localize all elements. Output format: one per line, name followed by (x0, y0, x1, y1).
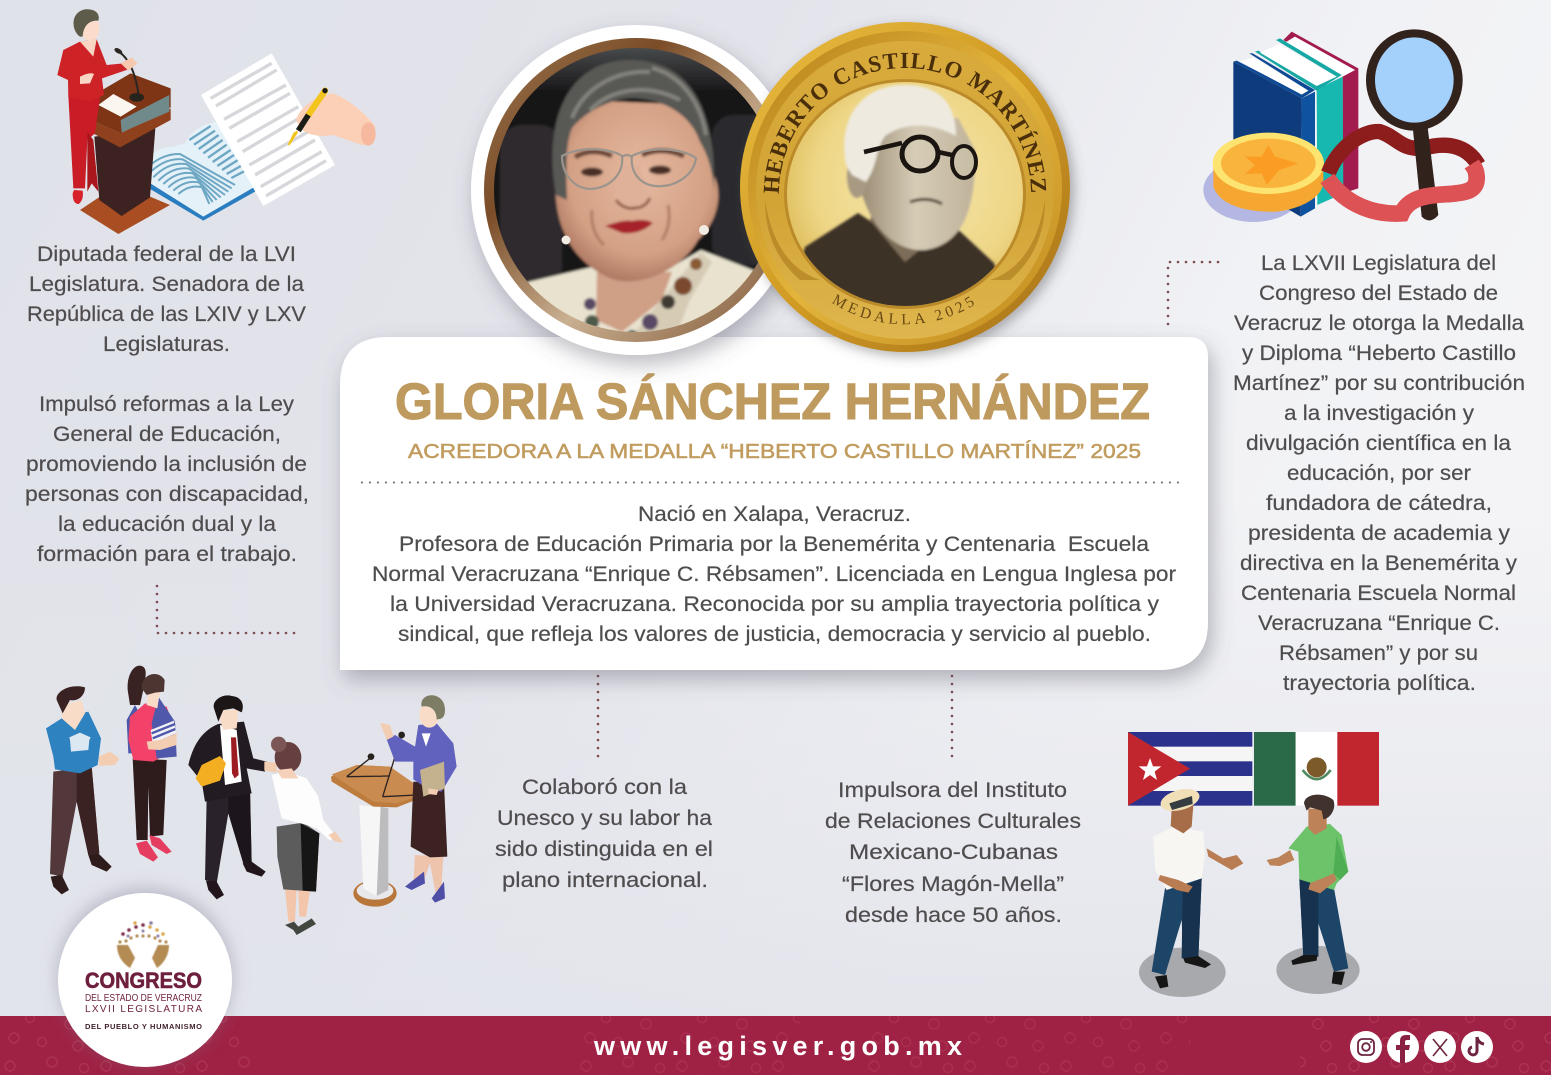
text block: Cuban institute: de Relaciones Culturales (825, 809, 1081, 833)
logo line 2: DEL ESTADO DE VERACRUZ (85, 992, 202, 1004)
icon: ribbon back (1328, 132, 1478, 173)
text block: Cuban institute: “Flores Magón-Mella” (842, 872, 1064, 896)
logo wordmark: CONGRESO (85, 968, 202, 993)
lips (605, 220, 653, 233)
illustration: group of people with speaker (46, 666, 457, 935)
person: student with backpack (127, 666, 177, 862)
text block: career left: la educación dual y la (58, 512, 276, 536)
text block: award reason: Martínez” por su contribución (1233, 371, 1525, 395)
person: man in dark suit with folder (188, 695, 277, 899)
text block: biography: sindical, que refleja los valores de justicia, democracia y servicio al pueblo. (398, 622, 1151, 646)
text block: award reason: divulgación científica en la (1246, 431, 1511, 455)
text block: career left (25, 242, 309, 566)
text block: career left: promoviendo la inclusión de (26, 452, 307, 476)
illustration: books, coin, ribbon and magnifier (1203, 29, 1478, 222)
person: woman in white blouse (271, 737, 343, 935)
blouse (526, 248, 754, 332)
text block: award reason: Congreso del Estado de (1259, 281, 1498, 305)
dotted connector: Cuba (951, 676, 953, 758)
social icons (1350, 1031, 1493, 1063)
heading: honoree name: GLORIA SÁNCHEZ HERNÁNDEZ (395, 373, 1150, 430)
text block: biography (372, 502, 1176, 646)
person: man in Unesco sweater (46, 686, 119, 894)
icon: speaker lectern (331, 732, 428, 907)
text block: career left: formación para el trabajo. (37, 542, 297, 566)
text block: award reason: Rébsamen” y por su (1279, 641, 1478, 665)
text block: award reason: a la investigación y (1284, 401, 1474, 425)
icon: coin shadow (1203, 158, 1303, 222)
footer band (0, 1016, 1551, 1075)
medal inscription: HEBERTO CASTILLO MARTÍNEZ (764, 52, 1046, 194)
website url: www.legisver.gob.mx (593, 1031, 962, 1061)
text block: career left: Legislaturas. (103, 332, 230, 356)
subheading: medal: ACREEDORA A LA MEDALLA “HEBERTO CASTILLO MARTÍNEZ” 2025 (408, 440, 1141, 463)
text block: Cuban institute (825, 778, 1081, 927)
flag: Mexico (1254, 732, 1379, 806)
text block: career left: Impulsó reformas a la Ley (39, 392, 294, 416)
icon: gold coin (1213, 133, 1324, 212)
icon: magnifier (1366, 29, 1463, 220)
logo mark (117, 921, 169, 968)
text block: Cuban institute: desde hace 50 años. (845, 903, 1062, 927)
text block: Unesco: plano internacional. (502, 868, 708, 892)
text block: career left: República de las LXIV y LXV (27, 302, 307, 326)
text block: career left: Diputada federal de la LVI (37, 242, 296, 266)
icon: podium (79, 47, 171, 234)
text block: biography: la Universidad Veracruzana. Reconocida por su amplia trayectoria política y (390, 592, 1159, 616)
medal portrait (802, 84, 996, 306)
logo: Congreso del Estado de Veracruz (58, 893, 232, 1067)
person: man with hat (1139, 785, 1243, 997)
medal year: MEDALLA 2025 (832, 294, 974, 324)
dotted connector: right text (1168, 262, 1218, 326)
icon: open book (129, 122, 257, 221)
text block: award reason: y Diploma “Heberto Castillo (1242, 341, 1516, 365)
icon: hand with pen (289, 88, 376, 146)
portrait: Gloria Sánchez Hernández (471, 25, 801, 355)
text block: Unesco: sido distinguida en el (495, 837, 713, 861)
glasses (562, 149, 696, 189)
brows and eyes (575, 151, 684, 157)
text block: award reason: Veracruzana “Enrique C. (1258, 611, 1500, 635)
text block: career left: General de Educación, (53, 422, 281, 446)
dotted connector: left text (157, 586, 300, 633)
text block: award reason: La LXVII Legislatura del (1261, 251, 1496, 275)
text block: award reason (1233, 251, 1525, 695)
icon: TikTok (1461, 1031, 1493, 1063)
text block: award reason: Veracruz le otorga la Medalla (1234, 311, 1524, 335)
illustration: legislator at podium with book and signing hand (57, 9, 376, 234)
text block: award reason: fundadora de cátedra, (1266, 491, 1492, 515)
text block: award reason: trayectoria política. (1283, 671, 1476, 695)
logo motto: DEL PUEBLO Y HUMANISMO (85, 1022, 202, 1031)
icon: X (1424, 1031, 1456, 1063)
text block: Cuban institute: Mexicano-Cubanas (849, 840, 1058, 864)
person: woman speaker (380, 695, 457, 903)
icon: Instagram (1350, 1031, 1382, 1063)
icon: legislator in red suit (57, 9, 137, 204)
text block: Cuban institute: Impulsora del Instituto (838, 778, 1067, 802)
icon: Facebook (1387, 1031, 1419, 1063)
text block: biography: Profesora de Educación Primaria por la Benemérita y Centenaria Escuela (399, 532, 1149, 556)
panel: central biography card (340, 337, 1208, 670)
text block: award reason: Centenaria Escuela Normal (1241, 581, 1516, 605)
text block: Unesco: Colaboró con la (522, 775, 687, 799)
medal: Heberto Castillo Martínez (740, 19, 1081, 363)
flag: Cuba (1128, 732, 1252, 806)
icon: ribbon front (1327, 164, 1477, 214)
dotted connector: Unesco (597, 676, 599, 758)
icon: document sheet (201, 53, 335, 206)
text block: Unesco (495, 775, 713, 892)
text block: biography: Nació en Xalapa, Veracruz. (638, 502, 911, 526)
text block: award reason: presidenta de academia y (1248, 521, 1510, 545)
text block: award reason: educación, por ser (1287, 461, 1471, 485)
text block: career left: personas con discapacidad, (25, 482, 309, 506)
text block: career left: Legislatura. Senadora de la (29, 272, 304, 296)
illustration: Cuba and Mexico flags with two men (1128, 732, 1379, 997)
text block: award reason: directiva en la Benemérita y (1240, 551, 1517, 575)
text block: Unesco: Unesco y su labor ha (497, 806, 712, 830)
logo line 3: LXVII LEGISLATURA (85, 1004, 202, 1015)
text block: biography: Normal Veracruzana “Enrique C. Rébsamen”. Licenciada en Lengua Inglesa por (372, 562, 1176, 586)
woman's face (555, 100, 718, 281)
person: man in green (1267, 795, 1360, 994)
icon: stack of books (1233, 32, 1358, 217)
woman's hair (552, 60, 714, 200)
